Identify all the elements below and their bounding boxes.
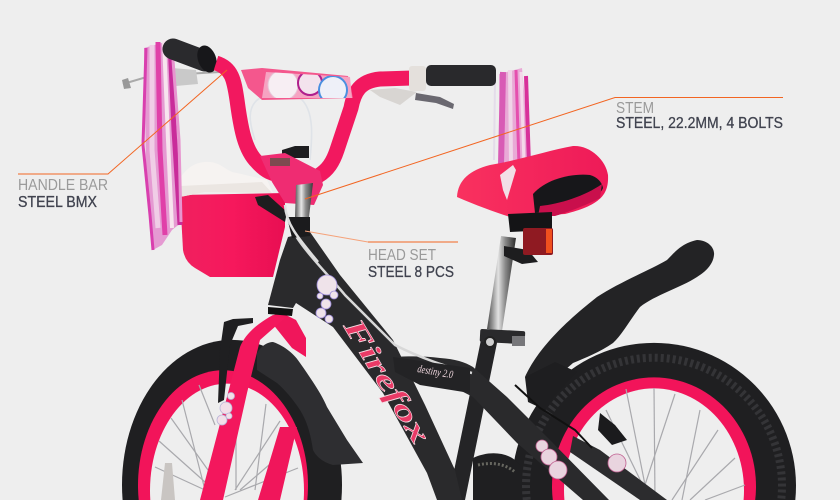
value: stem: STEEL, 22.2MM, 4 BOLTS [616,115,783,132]
handlebar pad [241,68,353,100]
seat clamp [480,329,525,347]
top tube cable [287,215,472,373]
rear tassels [494,68,530,165]
rear decal [536,440,626,479]
frame decal [316,275,338,323]
front fork [200,315,285,500]
rear brake [598,413,627,445]
label: head set: HEAD SET [368,247,436,264]
left grip [173,43,220,75]
fork decal [217,392,234,425]
reflector [523,228,553,255]
front wheel [122,340,342,500]
left tassels [143,40,182,250]
seat bracket [508,212,552,232]
basket [180,162,287,277]
value: head set: STEEL 8 PCS [368,264,454,281]
basket bracket [255,195,287,222]
frame: down tube and head tube [268,215,472,500]
handlebar [216,63,412,176]
chainring [473,453,520,500]
rear fender [525,240,714,395]
rear wheel [512,343,796,500]
label: handle bar: HANDLE BAR [18,177,108,194]
value: handle bar: STEEL BMX [18,194,97,211]
bar clamp and stem [260,146,323,262]
head set [287,217,310,238]
front fork rear leg [258,312,306,500]
right grip and controls [370,65,496,109]
chain stay [570,436,667,500]
callout: handle bar [18,70,227,211]
label: stem: STEM [616,100,654,117]
left brake lever [122,68,220,89]
seat post [480,236,538,347]
callout: stem [305,98,783,199]
brand name: Firefox [336,312,437,450]
cables [250,97,312,160]
callout: head set [305,231,458,281]
front fender [257,342,363,465]
rear fender mount [525,362,577,410]
brake shoe [161,463,175,500]
front brake [218,318,253,403]
frame: rear stay and seat tube [393,335,667,500]
saddle [457,146,608,255]
model name: destiny 2.0 [416,363,454,381]
